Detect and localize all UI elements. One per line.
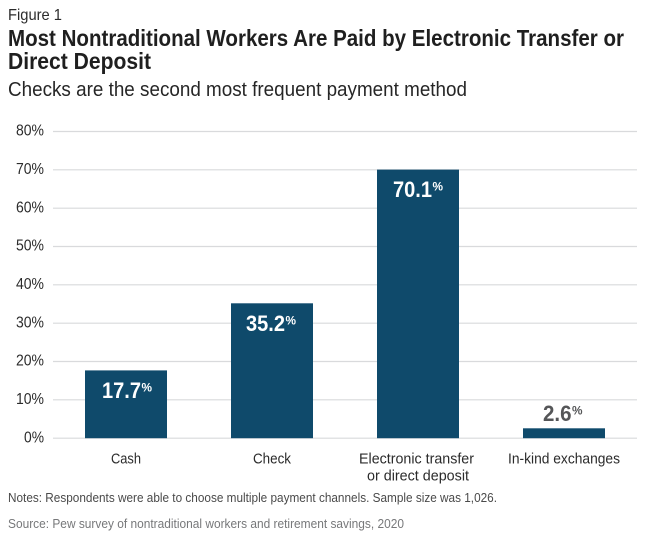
title bbox=[8, 25, 624, 74]
source: Source: Pew survey of nontraditional workers and retirement savings, 2020 bbox=[8, 516, 404, 531]
y-axis labels: 60% bbox=[16, 199, 44, 216]
bar: in-kind exchanges: 2.6 bbox=[543, 401, 572, 426]
bar: check: % bbox=[286, 314, 296, 328]
bar: electronic transfer or direct deposit bbox=[377, 170, 459, 438]
subtitle: Checks are the second most frequent payment method bbox=[8, 79, 467, 101]
y-axis labels: 0% bbox=[24, 429, 44, 446]
bar: cash bbox=[85, 370, 167, 438]
category labels: In-kind exchanges bbox=[508, 450, 620, 468]
y-axis labels: 20% bbox=[16, 353, 44, 370]
bar: check bbox=[231, 303, 313, 438]
bar: electronic transfer or direct deposit: % bbox=[432, 180, 443, 194]
gridlines bbox=[53, 132, 637, 438]
category labels: or direct deposit bbox=[367, 468, 470, 484]
category labels: Check bbox=[253, 450, 291, 468]
y-axis labels bbox=[16, 123, 44, 446]
bar: cash: % bbox=[142, 380, 152, 394]
y-axis labels: 30% bbox=[16, 314, 44, 331]
notes: Notes: Respondents were able to choose multiple payment channels. Sample size was 1,026. bbox=[8, 490, 497, 505]
y-axis labels: 70% bbox=[16, 161, 44, 178]
category labels: Cash bbox=[111, 450, 141, 468]
y-axis labels: 50% bbox=[16, 238, 44, 255]
y-axis labels: 10% bbox=[16, 391, 44, 408]
y-axis labels: 40% bbox=[16, 276, 44, 293]
title: Direct Deposit bbox=[8, 48, 151, 74]
bar: cash: 17.7 bbox=[102, 378, 141, 403]
category labels bbox=[111, 450, 620, 484]
category labels: Electronic transfer bbox=[359, 450, 474, 468]
figure label: Figure 1 bbox=[8, 7, 62, 24]
bar: in-kind exchanges bbox=[523, 401, 605, 438]
bar: electronic transfer or direct deposit: 70.1 bbox=[393, 177, 432, 202]
bar: check: 35.2 bbox=[246, 311, 285, 336]
y-axis labels: 80% bbox=[16, 123, 44, 140]
bar: in-kind exchanges: % bbox=[572, 404, 583, 418]
